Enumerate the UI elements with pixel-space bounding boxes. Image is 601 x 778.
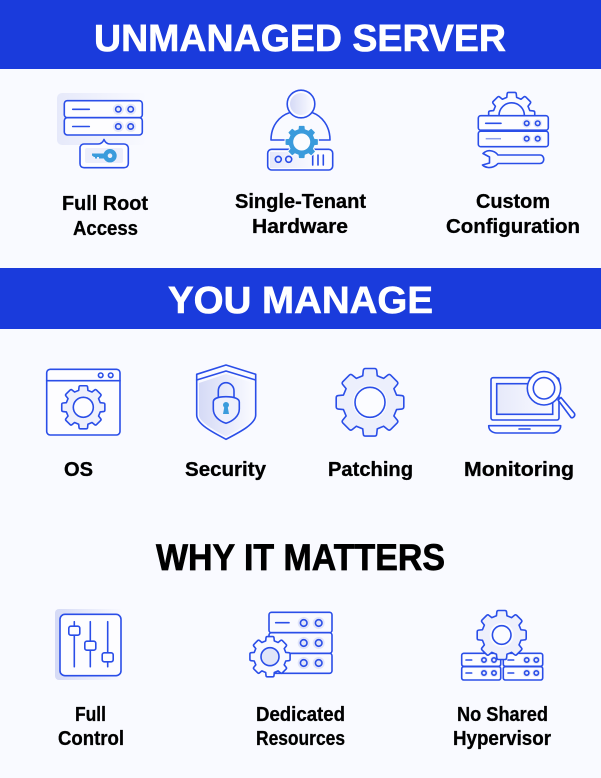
banner: you manage [0, 268, 601, 329]
label: OS: OS [64, 459, 93, 481]
icon: security shield with lock [197, 365, 256, 439]
label: full control: Control [58, 728, 124, 750]
icon: OS window with gear [47, 369, 120, 435]
label: full control: Full [75, 704, 106, 726]
label: dedicated resources [256, 704, 345, 750]
heading: why it matters: WHY IT MATTERS [156, 537, 445, 578]
label: no shared hypervisor: No Shared [457, 704, 548, 726]
icon: patching gear [336, 368, 404, 436]
icon: dedicated resources server with gear [250, 612, 332, 677]
label: security: Security [185, 459, 267, 481]
label: full control [58, 704, 124, 750]
label: single-tenant hardware: Single-Tenant [235, 191, 366, 213]
label: patching: Patching [328, 459, 413, 481]
icon: full control sliders [55, 609, 123, 680]
icon: custom configuration server with gear and wrench [478, 92, 548, 168]
label: custom configuration [446, 191, 580, 238]
banner: unmanaged server: UNMANAGED SERVER [94, 18, 506, 60]
label: no shared hypervisor [453, 704, 551, 750]
banner: you manage: YOU MANAGE [168, 280, 433, 322]
label: single-tenant hardware: Hardware [252, 216, 348, 238]
label: no shared hypervisor: Hypervisor [453, 728, 551, 750]
label: single-tenant hardware [235, 191, 366, 238]
icon: single-tenant hardware person with gear [268, 90, 333, 170]
label: full root access: Full Root [62, 193, 148, 215]
label: monitoring: Monitoring [464, 459, 574, 481]
label: custom configuration: Custom [476, 191, 550, 213]
label: custom configuration: Configuration [446, 216, 580, 238]
label: full root access: Access [73, 218, 138, 240]
banner: unmanaged server [0, 0, 601, 69]
icon: full root access server with key [57, 93, 147, 168]
label: dedicated resources: Dedicated [256, 704, 345, 726]
icon: no shared hypervisor gear above servers [462, 610, 543, 680]
label: dedicated resources: Resources [256, 728, 345, 750]
label: full root access [62, 193, 148, 240]
icon: monitoring laptop with magnifier [489, 372, 575, 433]
